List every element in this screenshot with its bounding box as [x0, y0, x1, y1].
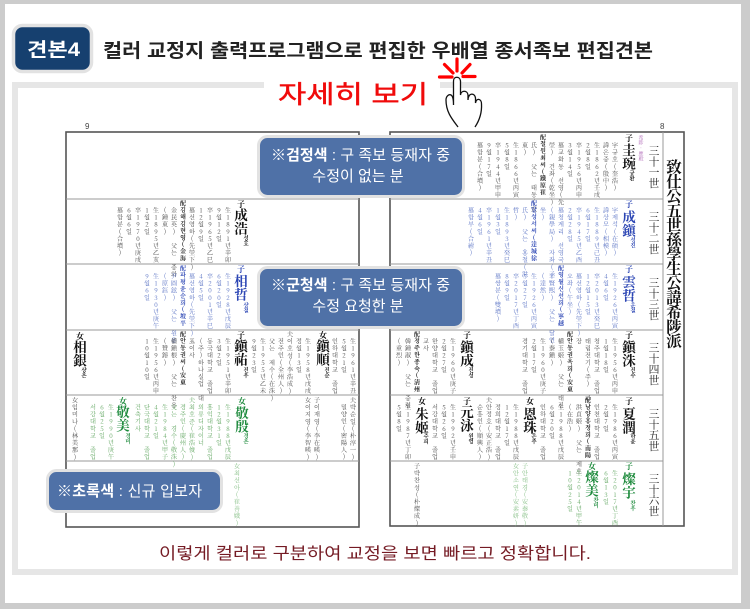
generation row 32: 成鎭: 卒1945년乙酉 [574, 206, 584, 264]
generation row: 成浩: 墓합분(合墳) [116, 206, 124, 257]
generation row 32: 成鎭: 6월17일 [584, 207, 592, 242]
generation row: 敬殷 敬美: 生1984년甲子 [160, 403, 170, 461]
generation row: 相哲: 相哲 [231, 273, 251, 302]
generation row: 相銀 鎭祐 鎭順: 진우 [242, 366, 250, 380]
callout: 군청색: 수정 요청한 분 [312, 298, 404, 315]
generation row: 相銀 鎭祐 鎭順: 5월21일 [340, 338, 348, 374]
badge: 견본4: 견본4 [27, 39, 80, 61]
generation row 35: 夏潤 恩珠 元泳 朱姬: 元泳 [457, 405, 477, 433]
generation row 34: 鎭洙 鎭成: 權玉姬) 父는 태진 [556, 337, 566, 409]
generation row: 成浩: 1월2일 [142, 207, 152, 235]
generation row 31: 圭琬: 墓교화동 선영(先 [556, 141, 566, 206]
generation row: 敬殷 敬美: 4월21일 [152, 404, 160, 440]
generation row: 相銀 鎭祐 鎭順: 相銀 [70, 339, 90, 368]
generation row: 相銀 鎭祐 鎭順: 配안동권씨(安東 [178, 330, 188, 387]
generation row: 敬殷 敬美: 홍익대학교 졸업 [206, 403, 214, 461]
generation row 32: 成鎭: 卒1961년辛丑 [484, 206, 494, 264]
generation row 33: 雲哲: 配영월신선희(寧越 [556, 264, 566, 327]
generation row 35: 夏潤 恩珠 元泳 朱姬: 인천대학교 졸업 [592, 403, 602, 461]
generation row 35: 夏潤 恩珠 元泳 朱姬: 은주 [530, 433, 538, 446]
generation row 33: 雲哲: 卒2017년丁酉 [512, 272, 520, 330]
generation row: 相哲: 配파평윤순희(坡平 [178, 264, 188, 327]
generation row: 敬殷 敬美: 건축기사 [134, 403, 142, 433]
generation row 35: 夏潤 恩珠 元泳 朱姬: 生1987년丁卯 [404, 403, 412, 461]
generation row 31: 圭琬: 東) [520, 141, 530, 157]
generation row 34: 鎭洙 鎭成: 진수 [629, 366, 637, 380]
generation row: 敬殷 敬美: 6월25일 [98, 404, 106, 440]
generation row 31: 圭琬: 圭琬 [619, 142, 639, 170]
footer note: 이렇게 컬러로 구분하여 교정을 보면 빠르고 정확합니다. [159, 544, 591, 563]
generation row: 成浩 [116, 199, 251, 278]
generation row 32: 成鎭: (親學局) 자좌(子 [548, 206, 556, 278]
generation labels [646, 145, 662, 517]
generation row 33: 雲哲: 卒2013년癸巳 [592, 272, 602, 330]
page number 8: 8 [660, 122, 665, 131]
generation row: 相銀 鎭祐 鎭順: 生1951년辛卯 [224, 337, 232, 395]
generation row 35: 夏潤 恩珠 元泳 朱姬: 12월17일 [502, 404, 512, 447]
generation row 34: 鎭洙 鎭成: 生1956년丙申 [610, 337, 620, 395]
generation row: 敬殷 敬美: 단국대학교 졸업 [142, 403, 152, 461]
generation row 35: 夏潤 恩珠 元泳 朱姬: 하윤 [629, 432, 637, 446]
generation row: 敬殷 敬美: 경은 [242, 432, 250, 445]
generation row 36: 燦宇 燦美: 子 [624, 462, 634, 471]
generation row: 敬殷 敬美: 夫박순일(朴淳一) [348, 396, 358, 461]
generation row 36: 燦宇 燦美: 子박찬성(朴燦成) [412, 462, 422, 527]
generation row 33: 雲哲: 辛賢熙) 父는 달연 [548, 272, 556, 344]
generation row: 相銀 鎭祐 鎭順: 진순 [323, 366, 331, 379]
generation row 35: 夏潤 恩珠 元泳 朱姬: 夏潤 [619, 406, 639, 435]
generation row: 敬殷 敬美: 12월31일 [214, 404, 224, 447]
generation row 32: 成鎭: 子 [624, 200, 634, 209]
generation row 35: 夏潤 恩珠 元泳 朱姬: 정희대학교 졸업 [494, 403, 502, 461]
generation row: 成浩: 卒1970년庚戌 [134, 206, 142, 264]
generation row: 成浩: 配김해김현영(金海 [178, 199, 188, 262]
generation row: 敬殷 敬美: 女이지영(李智暎) [304, 396, 312, 461]
generation row 31: 圭琬: 字규호(奎浩) [610, 141, 620, 192]
generation row 35: 夏潤 恩珠 元泳 朱姬: 洪貞姬) 父는 제호 [574, 403, 584, 475]
generation row 35: 夏潤 恩珠 元泳 朱姬: 女 [416, 396, 428, 406]
generation row 31: 圭琬: 2월8일 [584, 142, 592, 170]
generation row 32: 成鎭: 成鎭 [619, 209, 639, 238]
generation row 34: 鎭洙 鎭成: 진성 [467, 366, 475, 379]
generation row: 敬殷 敬美: 子이재영(李在暎) [312, 396, 322, 461]
generation row 34: 鎭洙 鎭成: 鎭成 [457, 339, 477, 368]
generation row 33: 雲哲: 雲哲 [619, 274, 639, 303]
generation row 36: 燦宇 燦美: 6월13일 [602, 470, 610, 506]
generation row 31: 圭琬: 生1866년丙寅 [512, 141, 520, 199]
generation row 35: 夏潤 恩珠 元泳 朱姬: 5월8일 [394, 404, 404, 432]
generation row: 敬殷 敬美: 의류디자이너 [196, 403, 206, 447]
callout: 검정색: 수정이 없는 분 [312, 168, 404, 185]
callout: 검정색: ※검정색 : 구 족보 등재자 중 [271, 147, 450, 164]
generation row: 相銀 鎭祐 鎭順: 인하대학교 졸업 [330, 337, 340, 395]
generation row 35: 夏潤 恩珠 元泳 朱姬: (在浩) [566, 403, 574, 433]
generation row 33: 雲哲: 오좌(午坐) [566, 273, 574, 316]
generation row: 成浩: 성호 [242, 234, 250, 247]
generation row 34: 鎭洙 鎭成: 子 [624, 331, 634, 340]
generation row: 相哲: 6월20일 [214, 273, 224, 308]
generation row: 敬殷 敬美: 서강대학교 졸업 [88, 403, 98, 461]
generation row 34: 鎭洙 鎭成: 한양대학교 졸업 [430, 337, 440, 395]
generation row 32: 成鎭: 2월28일 [566, 207, 574, 242]
generation row 34: 鎭洙 鎭成: 경기대학교 졸업 [520, 337, 530, 395]
generation row 32: 成鎭 [466, 199, 639, 278]
generation row 34: 鎭洙 鎭成 [394, 330, 639, 409]
generation row 34: 鎭洙 鎭成: 2월17일 [530, 338, 538, 374]
generation row 34: 鎭洙 鎭成: (泰鎭) [548, 337, 556, 367]
generation row 34: 鎭洙 鎭成: 韓鍾淑) 父는 중렬 [404, 337, 412, 409]
generation labels: 三十一世 [646, 145, 662, 189]
generation row: 相哲 [142, 264, 251, 344]
generation row 36: 燦宇 燦美: 10월25일 [566, 470, 574, 513]
generation row 36: 燦宇 燦美: 찬미 [592, 496, 600, 510]
generation row 31: 圭琬: 塋) 건좌(乾坐) [548, 141, 556, 206]
generation row 32: 成鎭: 生1893년癸巳 [502, 206, 512, 264]
panel: left page [66, 132, 359, 527]
generation row: 相哲: 상철 [242, 301, 250, 315]
generation row 33: 雲哲: 生1926년丙寅 [530, 272, 538, 330]
generation row: 相銀 鎭祐 鎭順: 夫이호성(李浩成) [286, 330, 294, 395]
generation row: 相銀 鎭祐 鎭順: 父는 제수(在洙) [268, 338, 276, 402]
generation row 33: 雲哲: (達然) [538, 272, 548, 302]
generation row 34: 鎭洙 鎭成: 교사 [422, 338, 430, 353]
generation row: 敬殷 敬美 [70, 396, 358, 468]
generation row: 成浩: 卒1965년乙巳 [206, 206, 214, 264]
generation row: 成浩: 生1891년辛卯 [224, 206, 232, 264]
generation row: 成浩: 墓선영하(先塋下) [188, 206, 196, 271]
generation row: 相哲: 墓선영하(先塋下) [188, 272, 196, 337]
generation row 32: 成鎭: 墓합부(合祔) [466, 206, 476, 257]
generation row: 相銀 鎭祐 鎭順: 女 [318, 330, 328, 340]
generation row 33: 雲哲 [494, 264, 639, 344]
callout: 군청색: ※군청색 : 구 족보 등재자 중 [271, 277, 450, 294]
generation row: 成浩: 9월12일 [214, 207, 224, 242]
generation row 34: 鎭洙 鎭成: 生1960년庚子 [448, 337, 458, 395]
generation row 31: 圭琬: 규환 [628, 170, 636, 182]
generation row: 相銀 鎭祐 鎭順: (주)하나실업 대 [196, 337, 206, 402]
generation row 33: 雲哲: 墓쌍분(雙墳) [494, 272, 502, 323]
generation row 35: 夏潤 恩珠 元泳 朱姬: 朱姬 [412, 406, 432, 435]
generation row 33: 雲哲: 8월9일 [502, 273, 512, 301]
generation row: 相銀 鎭祐 鎭順: 權鎭根) 父는 찬용 [170, 337, 178, 409]
generation row: 相哲: 生1928년戊辰 [224, 272, 232, 330]
generation row 33: 雲哲: 生1926년丙寅 [610, 272, 620, 330]
generation row: 相銀 鎭祐 鎭順: 生1955년乙未 [258, 337, 268, 395]
generation row 33: 雲哲: 12월15일 [584, 273, 592, 316]
generation row 34: 鎭洙 鎭成: 청주대학교 졸업 [592, 337, 602, 395]
generation row 35: 夏潤 恩珠 元泳 朱姬: 5월26일 [440, 404, 448, 440]
generation row 35: 夏潤 恩珠 元泳 朱姬: 6월20일 [548, 404, 556, 440]
generation row: 相銀 鎭祐 鎭順: 동국대학교 졸업 [206, 337, 214, 395]
generation row 35: 夏潤 恩珠 元泳 朱姬: 生1986년丙寅 [610, 403, 620, 461]
generation row: 敬殷 敬美: 경주인(慶州人) [178, 403, 188, 461]
generation row 31: 圭琬: 卒1944년甲申 [494, 141, 502, 199]
page number 9: 9 [85, 122, 90, 131]
generation row 35: 夏潤 恩珠 元泳 朱姬: 인하대학교 졸업 [538, 403, 548, 461]
generation row: 敬殷 敬美: 밀양인(密陽人) [340, 403, 348, 461]
callout: 군청색 [258, 268, 464, 328]
generation row 35: 夏潤 恩珠 元泳 朱姬: 원영 [467, 432, 475, 445]
generation row: 相哲: 子 [236, 265, 246, 274]
generation row 34: 鎭洙 鎭成: 장 [574, 337, 584, 345]
generation row 34: 鎭洙 鎭成: 生1960년庚子 [538, 337, 548, 395]
generation row: 相銀 鎭祐 鎭順: 10월10일 [142, 338, 152, 381]
generation row 31: 圭琬: 配철원최씨(鐵原崔 [538, 133, 548, 196]
generation row 35: 夏潤 恩珠 元泳 朱姬 [394, 396, 639, 475]
generation row 32: 成鎭: 4월6일 [476, 207, 484, 235]
generation row: 敬殷 敬美: 敬殷 [232, 405, 252, 434]
generation row 32: 成鎭: 氏) 父는 홍철(洪 [520, 206, 530, 278]
generation row 34: 鎭洙 鎭成: 鎭洙 [619, 339, 639, 368]
generation row: 相銀 鎭祐 鎭順: 生1958년戊戌 [304, 337, 312, 395]
generation row 36: 燦宇 燦美: 燦美 [582, 469, 602, 498]
link text: 자세히 보기: 자세히 보기 [278, 81, 428, 109]
generation row 36: 燦宇 燦美: 子안태경(安泰敬) [520, 462, 530, 527]
generation row: 相銀 鎭祐 鎭順: 표이사 [188, 338, 196, 360]
icon: clicking hand [440, 59, 482, 127]
generation row 33: 雲哲: 운철 [629, 302, 637, 315]
generation row: 相銀 鎭祐 鎭順 [70, 330, 358, 409]
generation row: 成浩: 12월9일 [196, 207, 206, 242]
generation row 35: 夏潤 恩珠 元泳 朱姬: 夫안정호(安正浩) [484, 396, 494, 461]
generation row: 相銀 鎭祐 鎭順: 生1961년辛丑 [348, 337, 358, 395]
generation row 35: 夏潤 恩珠 元泳 朱姬: 恩珠 [520, 407, 540, 435]
generation row: 敬殷 敬美: 女 [118, 396, 128, 406]
generation row: 敬殷 敬美: 경미 [124, 432, 132, 446]
generation row 35: 夏潤 恩珠 元泳 朱姬: 生1988년戊辰 [512, 403, 520, 461]
generation row: 敬殷 敬美: 敬美 [113, 404, 133, 433]
generation row 35: 夏潤 恩珠 元泳 朱姬: 配남양홍정희(南陽 [584, 396, 592, 459]
generation row 31: 圭琬: 子 [624, 134, 634, 143]
generation row: 成浩: 子 [236, 200, 246, 209]
generation row 31: 圭琬: 3월14일 [566, 142, 574, 178]
generation row: 成浩: 成浩 [231, 207, 251, 236]
generation row: 相銀 鎭祐 鎭順: 전주인(全州人) [276, 337, 286, 395]
generation row 35: 夏潤 恩珠 元泳 朱姬: 生1988년戊辰 [556, 403, 566, 461]
panel: outer frame [15, 80, 735, 572]
generation row 31: 圭琬: 生1862년壬戌 [592, 141, 602, 199]
generation row 32: 成鎭: 1월3일 [494, 207, 502, 235]
generation row 31: 圭琬: 卒1956년丙申 [574, 141, 584, 199]
generation row 36: 燦宇 燦美: 女안소연(安素妍) [512, 462, 520, 527]
generation labels: 三十二世 [646, 211, 662, 255]
generation row 33: 雲哲: 墓선영하(先塋下) [574, 272, 584, 337]
generation row 35: 夏潤 恩珠 元泳 朱姬: 주희 [422, 433, 430, 446]
callout: 초록색 [48, 470, 222, 512]
generation row: 相哲: 尹圓鉉) 父는 원용 [170, 272, 178, 344]
generation row 32: 成鎭: 諱상모(相模) [602, 206, 610, 257]
generation row: 成浩: 生1895년乙亥 [152, 206, 160, 264]
generation row 35: 夏潤 恩珠 元泳 朱姬: 子 [462, 397, 472, 406]
generation row: 相銀 鎭祐 鎭順: 9월23일 [250, 338, 258, 374]
generation row 32: 成鎭: 生1889년己丑 [592, 206, 602, 264]
generation row 32: 成鎭: 墓청계리 선영국 [556, 206, 566, 264]
generation row: 相銀 鎭祐 鎭順: 女 [74, 331, 86, 341]
generation row 35: 夏潤 恩珠 元泳 朱姬: 순흥인(順興人) [476, 403, 484, 461]
generation row: 최선아: 女최선아(崔善娥) [232, 462, 242, 527]
generation row: 敬殷 敬美: 生1990년庚午 [106, 403, 116, 461]
generation row 36: 燦宇 燦美 [412, 461, 639, 527]
generation row 34: 鎭洙 鎭成: 2월27일 [440, 338, 448, 374]
generation row 36: 燦宇 燦美: 生2017년丁酉 [610, 469, 620, 527]
generation row: 相銀 鎭祐 鎭順: 生1956년丙申 [152, 337, 160, 395]
generation row 36: 燦宇 燦美: 燦宇 [619, 471, 639, 499]
generation labels: 三十六世 [646, 473, 662, 517]
generation row: 敬殷 敬美: 女 [236, 396, 248, 406]
generation row 31: 圭琬: 諱은중(殷中) [602, 141, 610, 192]
generation row: 相銀 鎭祐 鎭順: (贊鎔) [160, 337, 170, 367]
generation row: 相哲: (原鈺) [160, 272, 170, 302]
generation row: 敬殷 敬美: 夫최호준(崔浩俊) [188, 396, 196, 461]
generation row 31: 圭琬: 5월8일 [502, 142, 512, 170]
generation row: 相銀 鎭祐 鎭順: 鎭祐 [231, 338, 251, 366]
generation row 35: 夏潤 恩珠 元泳 朱姬: 서강대학교 졸업 [430, 403, 440, 461]
generation row: 敬殷 敬美: 女임미나(林美那) [70, 396, 80, 461]
generation row: 相哲: 卒2001년辛巳 [206, 272, 214, 330]
generation row 31: 圭琬: 墓합분(合墳) [476, 141, 484, 192]
generation row: 相銀 鎭祐 鎭順: 鎭順 [313, 338, 333, 367]
generation row 34: 鎭洙 鎭成: 配청주한종숙(淸州 [412, 330, 422, 393]
vertical lineage title: 致仕公五世孫學生公諱希陟派 [663, 159, 685, 350]
generation row: 相銀 鎭祐 鎭順: 상은 [80, 366, 88, 379]
generation row 31: 圭琬: 氏) 父는 태동(宏 [530, 141, 538, 213]
generation row 32: 成鎭: 字제석(在碩) [610, 206, 620, 257]
generation row 34: 鎭洙 鎭成: (重烈) [394, 337, 404, 367]
generation row 35: 夏潤 恩珠 元泳 朱姬: 2월7일 [602, 404, 610, 432]
title: 컬러 교정지 출력프로그램으로 편집한 우배열 종서족보 편집견본 [103, 40, 653, 62]
generation row 36: 燦宇 燦美: 찬우 [629, 499, 637, 513]
callout: 검정색 [258, 136, 464, 196]
generation labels: 三十三世 [646, 277, 662, 321]
generation row 36: 燦宇 燦美: 女 [586, 461, 598, 471]
panel: right page [390, 132, 685, 527]
generation row 33: 雲哲: 5월27일 [520, 273, 530, 308]
generation row 34: 鎭洙 鎭成: 1월18일 [602, 338, 610, 374]
callout: 초록색: ※초록색 : 신규 입보자 [57, 483, 202, 500]
generation row 31: 圭琬: 9월17일 [484, 142, 494, 178]
generation row 33: 雲哲: 4월6일 [602, 273, 610, 301]
generation row 35: 夏潤 恩珠 元泳 朱姬: 女 [524, 396, 536, 406]
generation row 34: 鎭洙 鎭成: 子 [462, 331, 472, 340]
generation row 32: 成鎭: 配달성서씨(達城徐 [530, 199, 538, 262]
generation row 32: 成鎭: 성진 [629, 236, 637, 250]
generation row 33: 雲哲: 子 [624, 265, 634, 274]
generation row 35: 夏潤 恩珠 元泳 朱姬: 子 [624, 397, 634, 406]
generation labels: 三十五世 [646, 408, 662, 452]
generation labels: 三十四世 [646, 342, 662, 386]
generation row 35: 夏潤 恩珠 元泳 朱姬: 生1992년壬申 [448, 403, 458, 461]
generation row 34: 鎭洙 鎭成: 태림전기(주) 과 [584, 337, 592, 402]
generation row: 成浩: 6월6일 [124, 207, 134, 235]
generation row: 相銀 鎭祐 鎭順: 3월2일 [214, 338, 224, 366]
generation row 31: 圭琬 [476, 133, 644, 213]
generation row: 敬殷 敬美: 生1988년戊辰 [224, 403, 232, 461]
generation row: 成浩: 金民英) 父는 종와 [170, 206, 178, 278]
generation row 32: 成鎭: 哲) [512, 206, 520, 222]
generation row 31: 圭琬: 希陟·應殿 [637, 134, 644, 163]
badge: 견본4 [14, 26, 92, 72]
generation row: 相哲: 9월6일 [142, 273, 152, 301]
generation row: 成浩: (鍾東) [160, 206, 170, 236]
generation row: 相哲: 4월5일 [196, 273, 206, 301]
generation row: 相銀 鎭祐 鎭順: 子 [236, 331, 246, 340]
generation row 32: 成鎭: 坐) [538, 206, 548, 222]
generation row 34: 鎭洙 鎭成: 配안동권옥희(安東 [566, 330, 574, 393]
generation row: 相哲: 生1930년庚午 [152, 272, 160, 330]
generation row: 敬殷 敬美: 父는 경수(敬洙) [170, 404, 178, 468]
generation row: 相銀 鎭祐 鎭順: 정월13일 [294, 337, 304, 374]
generation row 36: 燦宇 燦美: 生2014년甲午 [574, 469, 584, 527]
